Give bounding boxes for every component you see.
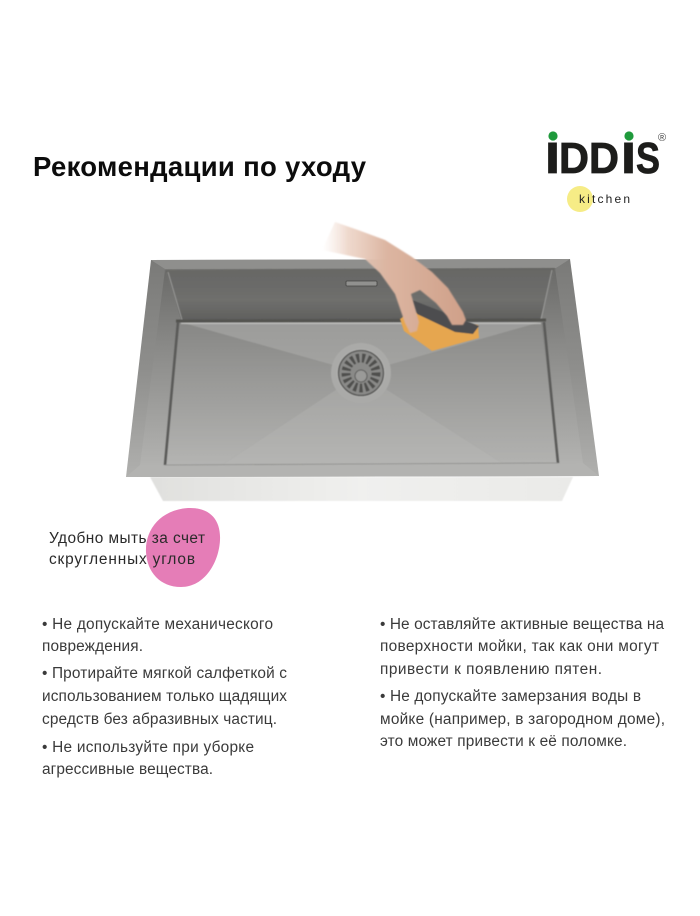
logo green dots: [548, 131, 634, 141]
title: Рекомендации по уходу: [33, 151, 367, 182]
floor panel: front: [222, 373, 502, 465]
left column care tips: использованием только щадящих: [42, 688, 287, 705]
left column care tips: повреждения.: [42, 638, 143, 655]
back wall: [165, 268, 555, 321]
yellow circle: [567, 186, 593, 212]
kitchen label: kitchen: [579, 192, 630, 206]
floor panel: right: [361, 322, 558, 463]
hand: [322, 222, 466, 333]
callout: rounded corners: скругленных углов: [49, 551, 195, 568]
left column care tips: агрессивные вещества.: [42, 761, 213, 778]
logo wordmark: D: [589, 135, 619, 183]
floor panel: back: [180, 322, 541, 373]
logo: IDDIS kitchen: [545, 131, 666, 212]
registered mark: ®: [658, 132, 666, 144]
logo wordmark: D: [559, 135, 589, 183]
right column care tips: это может привести к её поломке.: [380, 733, 627, 750]
pink blob: [146, 508, 220, 587]
right column care tips: [380, 616, 665, 750]
logo wordmark: [545, 135, 660, 183]
sink illustration: [126, 222, 599, 501]
logo wordmark: S: [636, 135, 660, 183]
sponge yellow side: [400, 312, 479, 351]
left column care tips: средств без абразивных частиц.: [42, 711, 277, 728]
left column care tips: • Протирайте мягкой салфеткой с: [42, 665, 287, 682]
sink underside: [150, 477, 573, 501]
left column care tips: [42, 616, 287, 778]
overflow slot: [346, 281, 377, 286]
right wall: [540, 268, 583, 463]
floor panel: left: [165, 322, 361, 465]
right column care tips: • Не оставляйте активные вещества на: [380, 616, 664, 633]
left column care tips: • Не допускайте механического: [42, 616, 273, 633]
right column care tips: поверхности мойки, так как они могут: [380, 638, 659, 655]
rim top highlight: [151, 259, 570, 269]
callout: rounded corners: [49, 508, 220, 587]
logo wordmark: I: [545, 135, 560, 183]
logo wordmark: I: [621, 135, 636, 183]
callout text: Удобно мыть за счет: [49, 530, 205, 547]
sponge: [400, 300, 479, 351]
right column care tips: мойке (например, в загородном доме),: [380, 711, 665, 728]
right column care tips: • Не допускайте замерзания воды в: [380, 688, 641, 705]
left column care tips: • Не используйте при уборке: [42, 739, 254, 756]
left wall: [140, 270, 181, 465]
rim front band: [126, 463, 599, 477]
drain: [331, 343, 391, 403]
corner and edge lines: [165, 270, 558, 465]
right column care tips: привести к появлению пятен.: [380, 661, 602, 678]
sink outer rim: [126, 259, 599, 477]
sponge dark top: [412, 300, 479, 334]
